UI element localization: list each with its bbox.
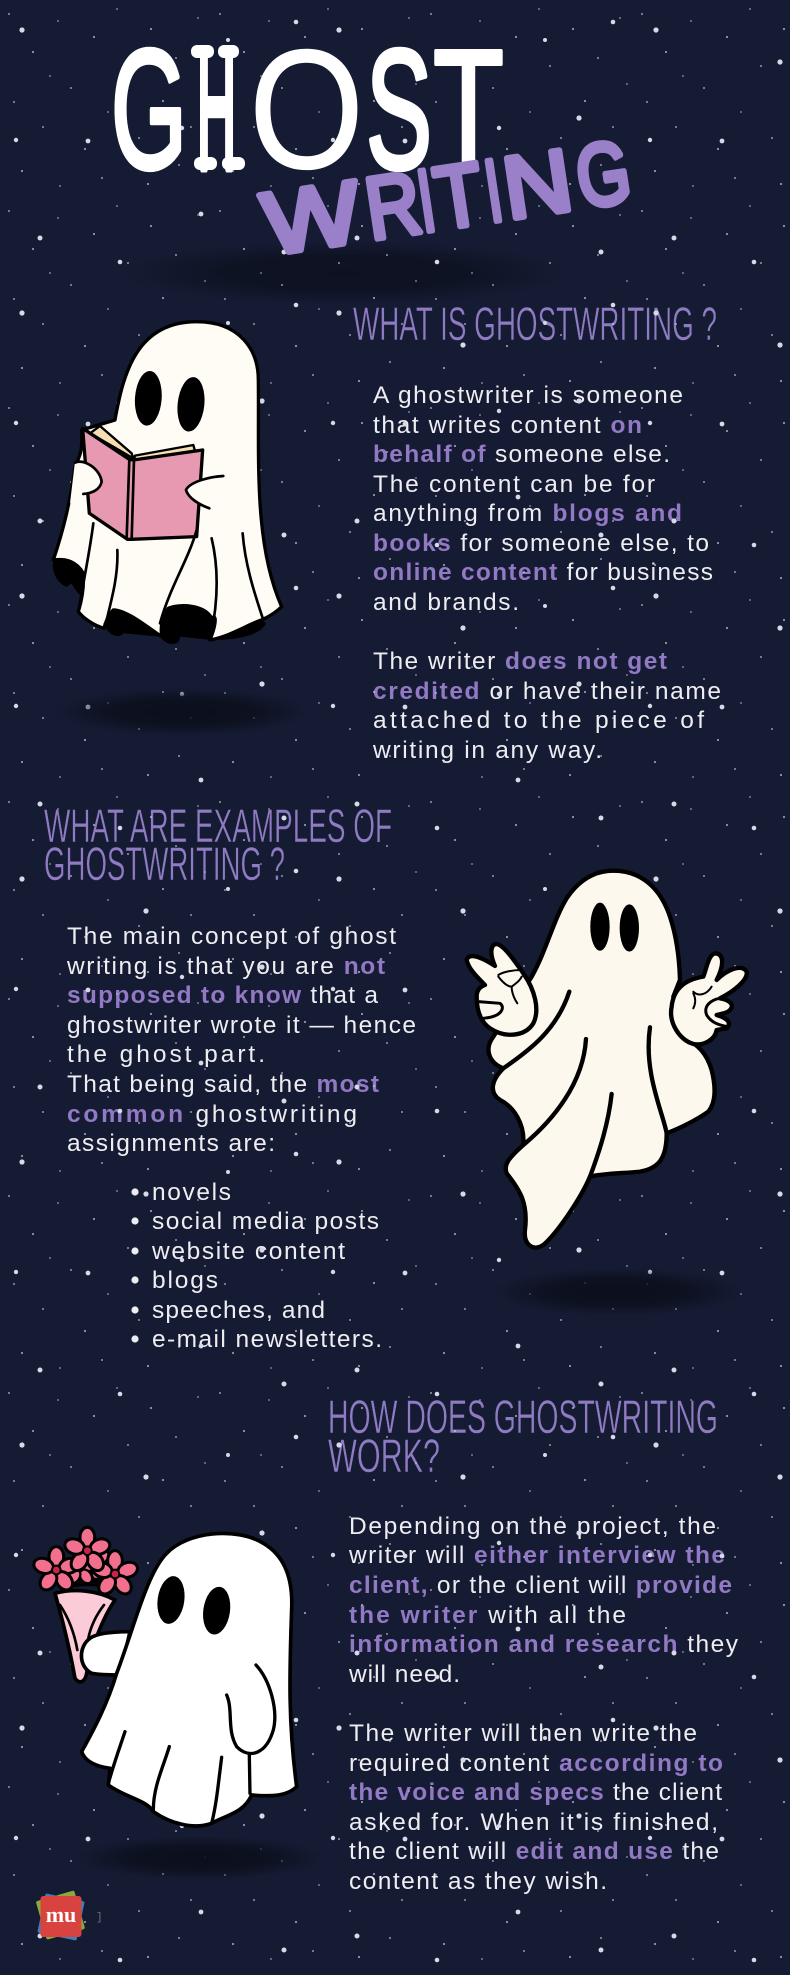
- bullet list: speeches, and: [152, 1297, 325, 1324]
- ghost shadow: bouquet ghost: [75, 1836, 325, 1880]
- bullet list: novels: [152, 1179, 231, 1206]
- section 1 text: [372, 382, 721, 764]
- section 2 heading: GHOSTWRITING ?: [44, 837, 285, 890]
- ghost shadow: reading ghost: [55, 688, 311, 736]
- logo: mu: [36, 1890, 103, 1941]
- section 2 heading: [44, 799, 392, 890]
- section 1 text: that writes content on: [373, 412, 642, 439]
- title word: writing: N: [497, 130, 578, 238]
- bullet list: social media posts: [152, 1208, 379, 1235]
- stray mark: ]: [96, 1912, 103, 1924]
- section 3 text: the client will edit and use the: [349, 1838, 719, 1865]
- title word: writing: G: [570, 121, 637, 227]
- title word: writing: I: [479, 140, 508, 241]
- section 2 text: common ghostwriting: [67, 1101, 357, 1128]
- section 3 text: required content according to: [349, 1750, 723, 1777]
- section 1 text: anything from blogs and: [373, 500, 682, 527]
- section 3 text: will need.: [348, 1661, 460, 1688]
- section 3 text: writer will either interview the: [348, 1542, 725, 1569]
- section 2 text: [66, 923, 416, 1157]
- section 2 text: writing is that you are not: [66, 953, 385, 980]
- title word: ghost: H: [197, 15, 236, 205]
- section 1 text: online content for business: [373, 559, 713, 586]
- section 2 text: the ghost part.: [67, 1041, 265, 1068]
- section 3 text: The writer will then write the: [349, 1720, 697, 1747]
- title word: ghost: S: [366, 15, 432, 205]
- right hand: [671, 953, 747, 1044]
- section 1 text: behalf of someone else.: [373, 441, 670, 468]
- section 1 text: The writer does not get: [373, 648, 667, 675]
- section 3 heading: WORK?: [328, 1429, 440, 1482]
- icon: ghost holding a bouquet: [32, 1527, 297, 1826]
- bullet list: website content: [151, 1238, 345, 1265]
- section 1 text: books for someone else, to: [373, 530, 709, 557]
- bouquet wrap: [55, 1591, 115, 1682]
- bouquet flowers: [32, 1527, 139, 1597]
- title: [111, 15, 637, 274]
- section 2 text: ghostwriter wrote it — hence: [67, 1012, 416, 1039]
- title word: ghost: G: [111, 15, 187, 205]
- bullet list: [131, 1179, 382, 1353]
- title word: ghost: T: [433, 15, 504, 205]
- section 3 text: the voice and specs the client: [349, 1779, 722, 1806]
- bullet list: e-mail newsletters.: [152, 1326, 382, 1353]
- section 2 text: That being said, the most: [67, 1071, 379, 1098]
- section 2 heading: WHAT ARE EXAMPLES OF: [44, 799, 392, 852]
- left hand: [467, 944, 536, 1035]
- section 1 text: attached to the piece of: [373, 707, 704, 734]
- section 1 text: writing in any way.: [372, 737, 602, 764]
- section 2 text: assignments are:: [67, 1130, 275, 1157]
- section 3 text: the writer with all the: [349, 1602, 626, 1629]
- title word: ghost: [111, 15, 504, 205]
- title word: writing: W: [256, 162, 367, 274]
- icon: ghost making peace signs: [467, 871, 747, 1248]
- section 3 text: client, or the client will provide: [349, 1572, 732, 1599]
- section 3 text: [348, 1513, 739, 1895]
- section 3 text: asked for. When it is finished,: [349, 1809, 718, 1836]
- title word: writing: T: [428, 143, 489, 248]
- section 1 text: and brands.: [373, 589, 519, 616]
- body: [82, 1533, 297, 1826]
- section 1 text: credited or have their name: [373, 678, 721, 705]
- section 3 text: content as they wish.: [349, 1868, 607, 1895]
- title word: writing: I: [411, 150, 441, 251]
- title word: writing: R: [359, 153, 427, 258]
- section 1 text: A ghostwriter is someone: [373, 382, 683, 409]
- logo: mu: mu: [46, 1902, 76, 1927]
- ghost shadow: peace ghost: [492, 1268, 742, 1316]
- icon: ghost reading a book: [53, 322, 282, 644]
- title word: ghost: O: [249, 15, 364, 205]
- section 3 heading: [328, 1390, 718, 1482]
- section 3 text: information and research they: [349, 1631, 739, 1658]
- bullet list: blogs: [152, 1267, 218, 1294]
- section 1 text: The content can be for: [373, 471, 655, 498]
- section 3 text: Depending on the project, the: [349, 1513, 716, 1540]
- arm: [81, 1632, 130, 1675]
- title shadow: [120, 241, 570, 305]
- section 2 text: supposed to know that a: [67, 982, 378, 1009]
- section 2 text: The main concept of ghost: [67, 923, 396, 950]
